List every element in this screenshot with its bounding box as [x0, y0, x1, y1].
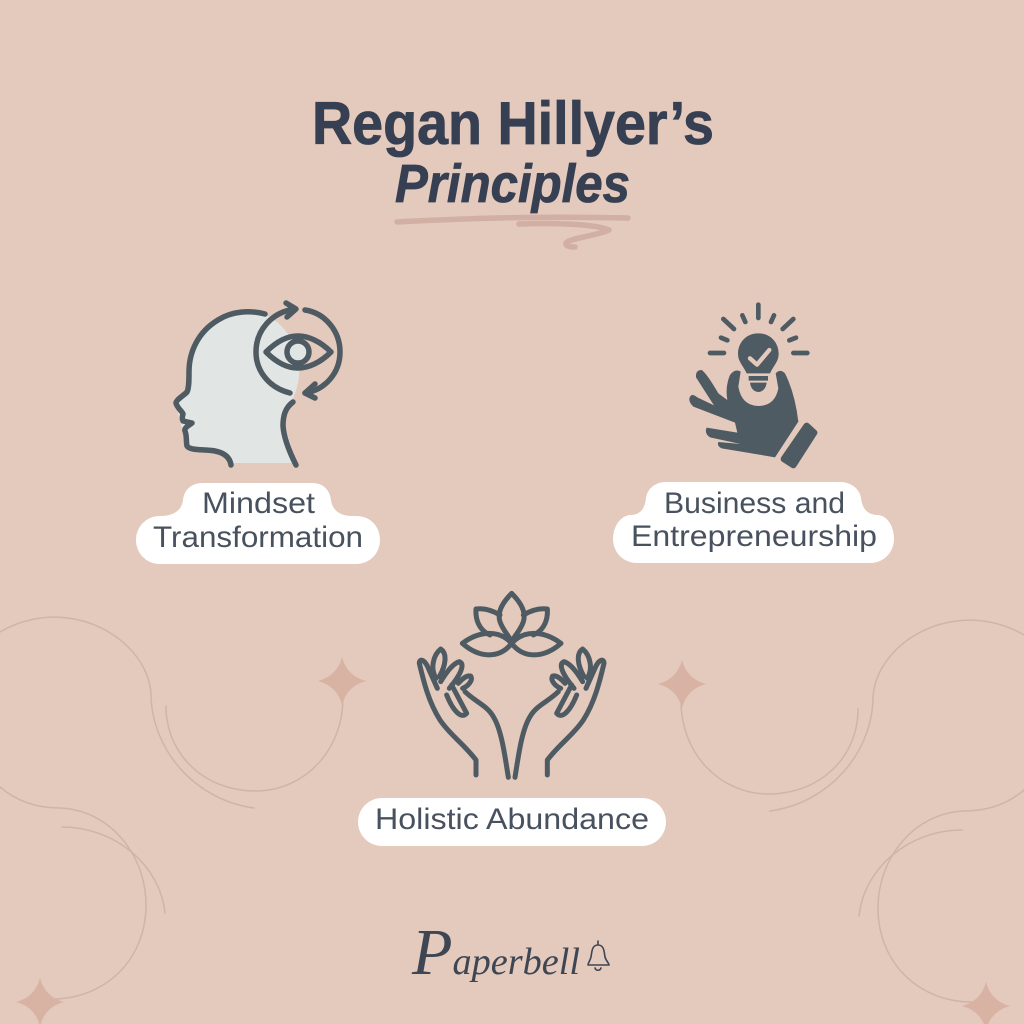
label pill: [358, 798, 666, 846]
panel: mindset transformation: [136, 303, 380, 564]
left background swirls: [0, 617, 343, 999]
icon: bell: [588, 941, 609, 970]
sparkle: bottom right: [962, 982, 1010, 1024]
panel: business and entrepreneurship: [613, 305, 894, 563]
wordmark: Paperbell: [411, 916, 580, 989]
title line: principles: Principles: [395, 154, 630, 214]
left hand: [419, 649, 508, 777]
light rays: [710, 305, 807, 353]
right hand: [515, 649, 604, 777]
sparkle: center right: [658, 660, 706, 708]
bulb: [738, 333, 779, 392]
cuff: [784, 426, 814, 465]
title: [312, 90, 714, 214]
label text: Transformation: [153, 521, 363, 554]
brand logo: [411, 916, 609, 989]
label text: Entrepreneurship: [631, 520, 877, 553]
lotus: [499, 593, 524, 642]
label pill: [613, 482, 894, 563]
title underline scribble: [397, 217, 628, 247]
icon: hand holding lightbulb: [689, 305, 814, 465]
label text: Business and: [664, 487, 845, 520]
panel: holistic abundance: [358, 593, 666, 846]
right background swirls: [681, 620, 1024, 1002]
title line: name: Regan Hillyer’s: [312, 90, 714, 157]
sparkle: center left: [318, 657, 366, 705]
label text: Holistic Abundance: [375, 803, 649, 836]
icon: head with eye and cycle arrows: [175, 303, 340, 465]
label pill: [136, 483, 380, 564]
hand: [689, 370, 798, 457]
label text: [631, 487, 877, 553]
label text: [153, 487, 363, 554]
sparkle: bottom left: [16, 978, 64, 1024]
check mark: [750, 350, 769, 365]
label text: Mindset: [202, 487, 316, 520]
icon: hands with lotus: [419, 593, 604, 777]
